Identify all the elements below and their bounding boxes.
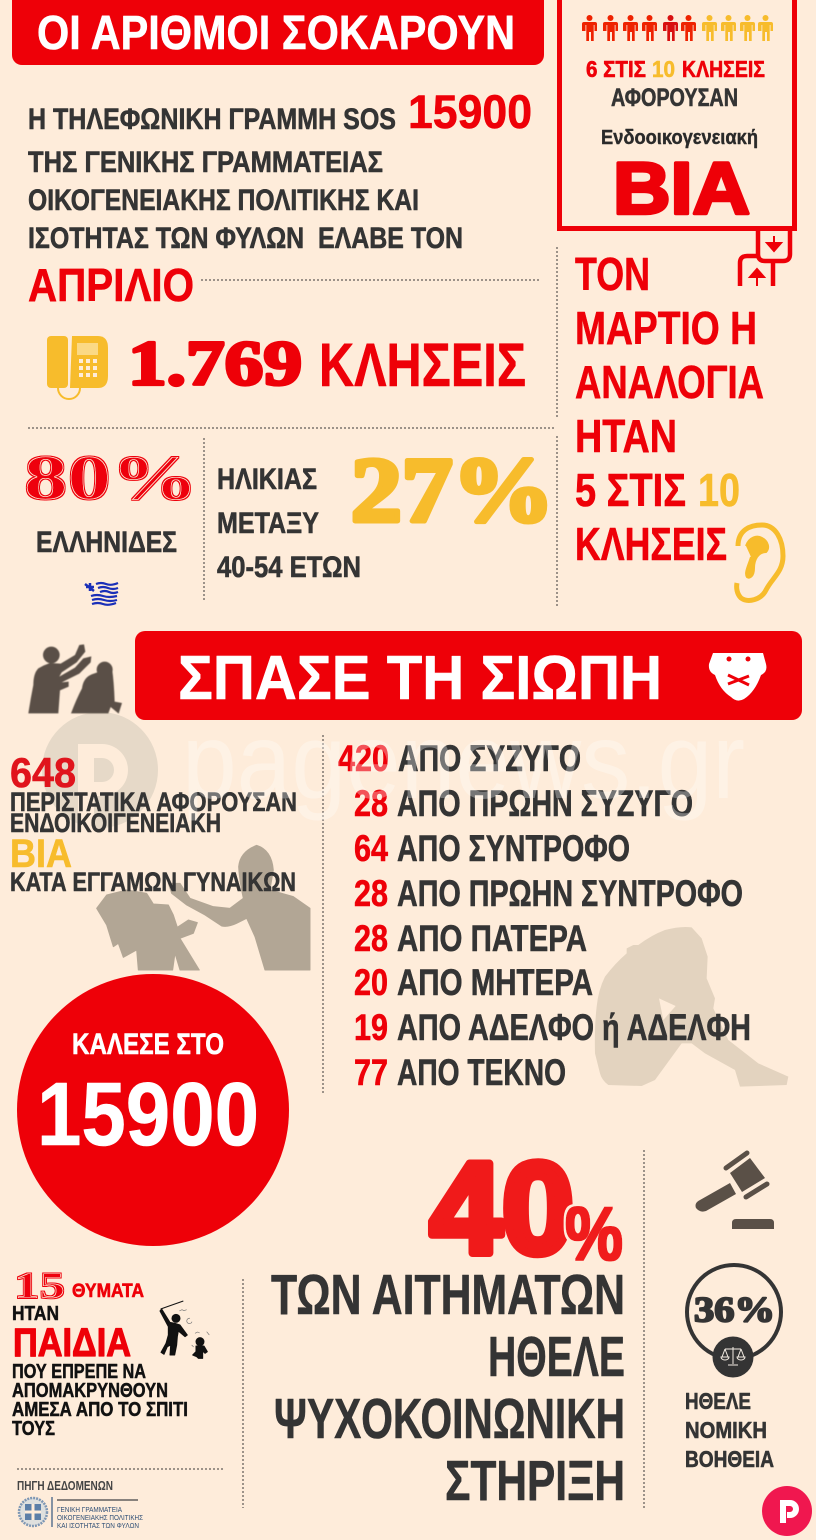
text: 648 incidents: ΚΑΤΑ ΕΓΓΑΜΩΝ ΓΥΝΑΙΚΩΝ (10, 867, 296, 897)
source credit: ΟΙΚΟΓΕΝΕΙΑΚΗΣ ΠΟΛΙΤΙΚΗΣ (57, 1513, 143, 1522)
stat: 40 percent psychosocial support: ΤΩΝ ΑΙΤΗΜΑΤΩΝ (271, 1263, 625, 1327)
panel: 6 in 10 calls: 6 ΣΤΙΣ (586, 56, 646, 82)
stat: 36 percent legal help: ΒΟΗΘΕΙΑ (685, 1446, 774, 1472)
panel: 6 in 10 calls (560, 0, 794, 230)
icon: gavel (696, 1153, 774, 1229)
text: 15 victims were children: 15 (14, 1266, 65, 1307)
text: 15 victims were children: ΠΑΙΔΙΑ (13, 1321, 131, 1365)
text: March ratio: ΗΤΑΝ (575, 410, 677, 462)
icon: ear (737, 525, 783, 600)
list: perpetrators: ΑΠΟ ΠΑΤΕΡΑ (397, 918, 587, 959)
stat: 80 percent Greek women (24, 443, 198, 559)
stat: 40 percent psychosocial support: ΗΘΕΛΕ (488, 1325, 625, 1389)
stat: age 40-54: ΜΕΤΑΞΥ (217, 507, 319, 540)
panel: 6 in 10 calls: Ενδοοικογενειακή (601, 127, 758, 149)
badge ring with scales (687, 1265, 781, 1378)
intro text block: ΙΣΟΤΗΤΑΣ ΤΩΝ ΦΥΛΩΝ ΕΛΑΒΕ ΤΟΝ (28, 222, 463, 255)
icon: arrows exchange (740, 231, 790, 286)
text: March ratio: ΤΟΝ (575, 248, 650, 300)
stat: age 40-54: 27% (351, 439, 554, 541)
list: perpetrators: 28 (354, 873, 388, 914)
list: perpetrators: 28 (354, 783, 388, 824)
list: perpetrators: 19 (354, 1007, 388, 1048)
text: 15 victims were children: ΘΥΜΑΤΑ (72, 1281, 144, 1302)
list: perpetrators: 20 (354, 962, 388, 1003)
stat: age 40-54: ΗΛΙΚΙΑΣ (217, 463, 317, 496)
stat: 36 percent legal help: ΝΟΜΙΚΗ (685, 1417, 767, 1443)
banner: break the silence (135, 631, 802, 720)
list: perpetrators: ΑΠΟ ΣΥΝΤΡΟΦΟ (397, 828, 630, 869)
text: 648 incidents: 648 (10, 749, 76, 796)
source credit (17, 1479, 143, 1530)
callout circle: call 15900: 15900 (37, 1065, 259, 1165)
pictogram: ten people (582, 15, 773, 41)
watermark: logo circle (42, 712, 158, 828)
text: 648 incidents: ΠΕΡΙΣΤΑΤΙΚΑ ΑΦΟΡΟΥΣΑΝ (10, 787, 297, 817)
list: perpetrators: ΑΠΟ ΤΕΚΝΟ (397, 1052, 566, 1093)
source credit: ΠΗΓΗ ΔΕΔΟΜΕΝΩΝ (17, 1479, 113, 1493)
stat: 36 percent legal help: ΗΘΕΛΕ (685, 1388, 751, 1414)
list: perpetrators: ΑΠΟ ΣΥΖΥΓΟ (398, 738, 581, 779)
callout circle: call 15900: ΚΑΛΕΣΕ ΣΤΟ (72, 1028, 224, 1061)
text: 15 victims were children (12, 1266, 188, 1440)
stat: 1.769 calls: 1.769 (128, 328, 302, 398)
intro text block: 15900 (408, 85, 532, 138)
stat: 40 percent psychosocial support: ΣΤΗΡΙΞΗ (445, 1449, 625, 1513)
title banner: ΟΙ ΑΡΙΘΜΟΙ ΣΟΚΑΡΟΥΝ (37, 7, 515, 60)
logo: pagenews P (762, 1486, 812, 1536)
stat: 40 percent psychosocial support: 40 (430, 1135, 574, 1281)
list: perpetrators: 77 (354, 1052, 388, 1093)
text: 15 victims were children: ΑΜΕΣΑ ΑΠΟ ΤΟ ΣΠΙΤΙ (12, 1399, 188, 1421)
watermark: site name: pagenews.gr (182, 700, 745, 821)
source credit: ΓΕΝΙΚΗ ΓΡΑΜΜΑΤΕΙΑ (57, 1505, 122, 1514)
emblem of Greece (19, 1498, 47, 1526)
intro text block: ΤΗΣ ΓΕΝΙΚΗΣ ΓΡΑΜΜΑΤΕΙΑΣ (28, 146, 383, 179)
text: 15 victims were children: ΑΠΟΜΑΚΡΥΝΘΟΥΝ (12, 1380, 168, 1402)
intro text block: Η ΤΗΛΕΦΩΝΙΚΗ ΓΡΑΜΜΗ SOS (28, 103, 396, 136)
panel: 6 in 10 calls: 10 (652, 56, 675, 82)
intro text block (28, 85, 532, 311)
text: 15 victims were children: ΤΟΥΣ (12, 1418, 55, 1440)
stat: 40 percent psychosocial support (271, 1135, 625, 1513)
text: March ratio: ΜΑΡΤΙΟ Η (575, 302, 757, 354)
image: silhouette crouching woman (595, 927, 788, 1087)
list: perpetrators (338, 738, 751, 1093)
stat: 36 percent legal help (685, 1265, 781, 1472)
callout circle: call 15900 (17, 974, 289, 1246)
text: March ratio: ΚΛΗΣΕΙΣ (575, 518, 727, 570)
icon: gagged mask (709, 653, 766, 701)
stat: 80 percent Greek women: 80% (24, 443, 198, 513)
text: 648 incidents (10, 749, 297, 897)
list: perpetrators: 420 (338, 738, 389, 779)
list: perpetrators: 28 (354, 918, 388, 959)
text: 648 incidents: ΕΝΔΟΙΚΟΙΓΕΝΕΙΑΚΗ (10, 808, 221, 838)
stat: 1.769 calls (128, 328, 526, 399)
text: 15 victims were children: ΠΟΥ ΕΠΡΕΠΕ ΝΑ (12, 1361, 146, 1383)
image: silhouette couple (28, 644, 122, 714)
stat: 40 percent psychosocial support: % (565, 1192, 623, 1277)
panel: 6 in 10 calls: ΚΛΗΣΕΙΣ (682, 56, 765, 82)
stat: 40 percent psychosocial support: ΨΥΧΟΚΟΙΝΩΝΙΚΗ (274, 1387, 625, 1451)
text: March ratio: 10 (698, 464, 740, 516)
list: perpetrators: 64 (354, 828, 388, 869)
stat: 1.769 calls: ΚΛΗΣΕΙΣ (319, 331, 526, 399)
image: silhouette man striking woman (97, 845, 310, 970)
stat: age 40-54 (217, 439, 554, 584)
source credit: ΚΑΙ ΙΣΟΤΗΤΑΣ ΤΩΝ ΦΥΛΩΝ (57, 1521, 139, 1530)
intro text block: ΟΙΚΟΓΕΝΕΙΑΚΗΣ ΠΟΛΙΤΙΚΗΣ ΚΑΙ (28, 184, 419, 217)
stat: age 40-54: 40-54 ΕΤΩΝ (217, 551, 361, 584)
intro text block: ΑΠΡΙΛΙΟ (28, 259, 194, 311)
panel: 6 in 10 calls: ΒΙΑ (613, 148, 750, 230)
text: March ratio (575, 248, 764, 570)
icon: Greek flag (85, 583, 118, 605)
panel: 6 in 10 calls: ΑΦΟΡΟΥΣΑΝ (611, 84, 738, 112)
text: March ratio: ΑΝΑΛΟΓΙΑ (575, 356, 764, 408)
stat: 36 percent legal help: 36% (694, 1290, 775, 1330)
stat: 80 percent Greek women: ΕΛΛΗΝΙΔΕΣ (36, 526, 177, 559)
banner: break the silence: ΣΠΑΣΕ ΤΗ ΣΙΩΠΗ (178, 644, 662, 713)
icon: adult hitting child (160, 1301, 209, 1358)
text: 15 victims were children: ΗΤΑΝ (12, 1303, 59, 1325)
list: perpetrators: ΑΠΟ ΜΗΤΕΡΑ (397, 962, 593, 1003)
icon: telephone (47, 336, 108, 399)
text: 648 incidents: ΒΙΑ (10, 832, 72, 876)
text: March ratio: 5 ΣΤΙΣ (575, 464, 686, 516)
list: perpetrators: ΑΠΟ ΠΡΩΗΝ ΣΥΖΥΓΟ (397, 783, 693, 824)
